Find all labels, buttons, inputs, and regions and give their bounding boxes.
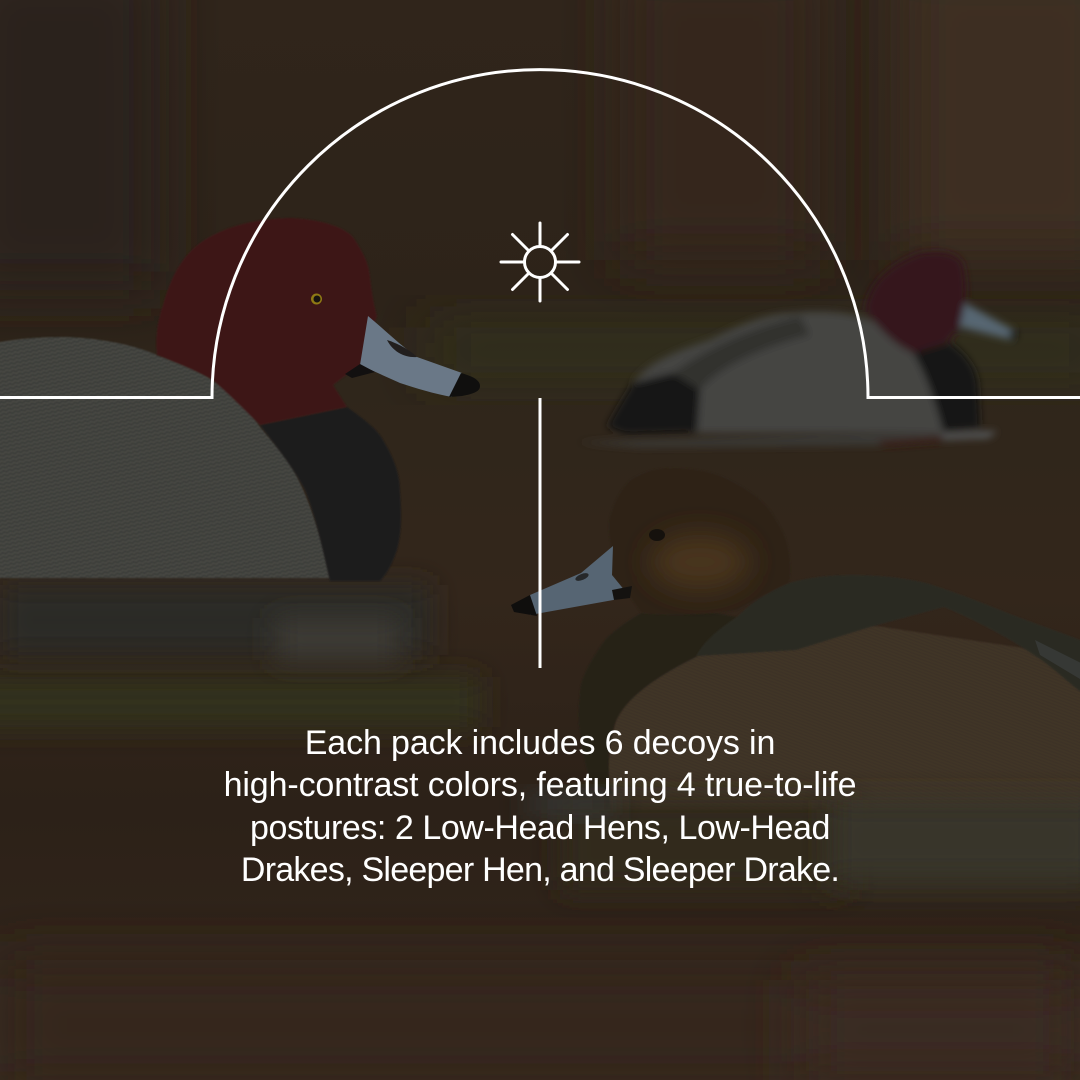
caption text xyxy=(224,724,856,889)
caption text: postures: 2 Low-Head Hens, Low-Head xyxy=(250,809,830,847)
caption text: Each pack includes 6 decoys in xyxy=(305,724,775,762)
vertical stem xyxy=(538,398,542,668)
hen bill xyxy=(530,546,630,615)
hen eye xyxy=(649,529,665,541)
drake head xyxy=(156,218,377,425)
hen wing xyxy=(696,575,1080,695)
lower water blur xyxy=(525,795,1080,890)
hen breast xyxy=(578,610,737,795)
near drake xyxy=(0,218,480,581)
caption text: Drakes, Sleeper Hen, and Sleeper Drake. xyxy=(241,851,839,889)
caption text: high-contrast colors, featuring 4 true-to-life xyxy=(224,766,856,804)
hen head xyxy=(609,468,790,615)
drake breast xyxy=(260,407,401,581)
hen body xyxy=(608,625,1080,810)
drake bill xyxy=(360,316,462,397)
arch with horizontal arms xyxy=(0,70,1080,398)
near hen xyxy=(511,468,1080,810)
far drake, blurred xyxy=(577,252,1017,447)
icon: sun xyxy=(501,223,579,301)
drake eye xyxy=(311,294,322,304)
drake body xyxy=(0,337,330,578)
